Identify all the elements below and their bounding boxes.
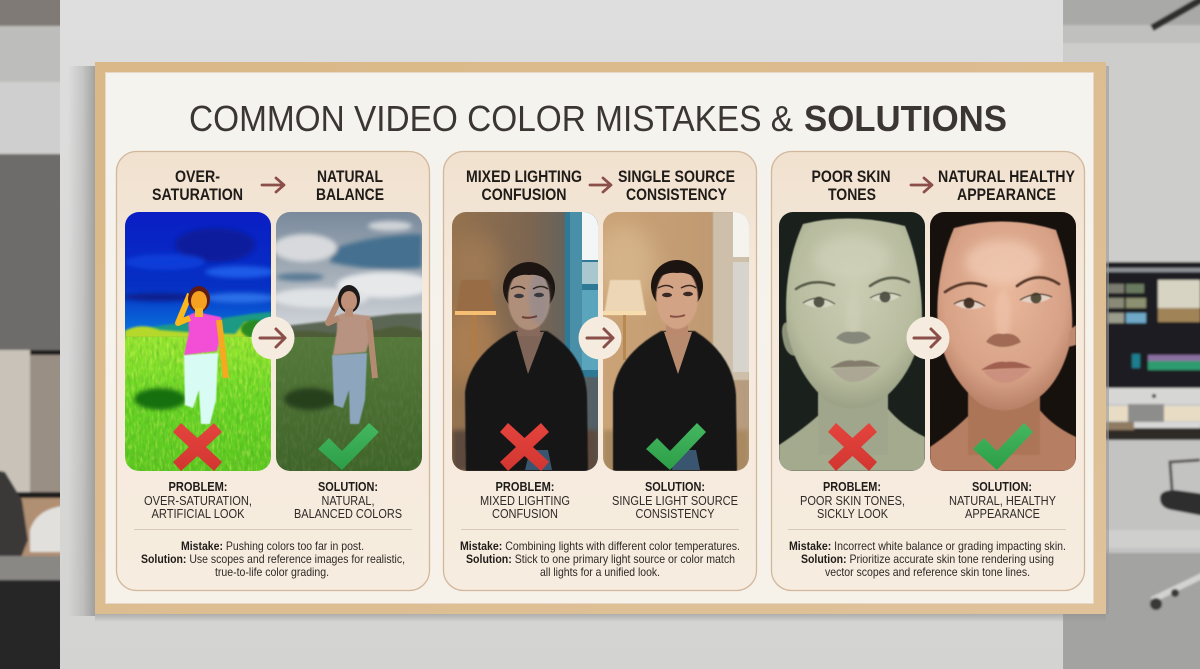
photo: over-saturated woman in field — [122, 212, 275, 471]
photo: mixed lighting portrait — [442, 212, 598, 471]
description text: Mistake: Incorrect white balance or grading impacting skin. — [789, 539, 1066, 553]
icon: red cross — [173, 423, 222, 471]
arrow: heading — [262, 178, 284, 192]
solution label — [612, 479, 738, 521]
problem label: ARTIFICIAL LOOK — [152, 506, 245, 521]
heading: over-saturation — [152, 167, 243, 204]
description text — [460, 539, 740, 579]
wooden frame — [95, 62, 1106, 614]
arrow: heading — [590, 178, 611, 192]
description text: vector scopes and reference skin tone lines. — [825, 565, 1030, 579]
icon: green check — [973, 423, 1033, 470]
solution label: NATURAL, HEALTHY — [949, 493, 1056, 508]
photo: sickly skin portrait — [779, 212, 925, 471]
problem label: MIXED LIGHTING — [480, 493, 570, 508]
solution label: BALANCED COLORS — [294, 506, 402, 521]
heading: natural balance — [316, 167, 384, 204]
heading: single source consistency: CONSISTENCY — [626, 185, 728, 204]
solution label: SOLUTION: — [645, 479, 705, 494]
photo: healthy skin portrait — [930, 212, 1076, 471]
background: blurred office right — [1062, 0, 1200, 669]
title: SOLUTIONS — [804, 98, 1007, 139]
photo: natural woman in field — [272, 212, 433, 471]
problem label: POOR SKIN TONES, — [800, 493, 905, 508]
heading: poor skin tones: TONES — [828, 185, 876, 204]
solution label — [949, 479, 1056, 521]
heading: mixed lighting confusion: MIXED LIGHTING — [466, 167, 582, 186]
problem label — [480, 479, 570, 521]
solution label: CONSISTENCY — [636, 506, 715, 521]
description text — [141, 539, 405, 579]
panel: mixed lighting to single source — [442, 152, 756, 590]
description text: true-to-life color grading. — [215, 565, 329, 579]
solution label: SOLUTION: — [318, 479, 378, 494]
icon: green check — [318, 423, 379, 470]
heading: mixed lighting confusion — [466, 167, 582, 204]
icon: arrow in circle — [906, 316, 950, 360]
heading: poor skin tones — [812, 167, 890, 204]
heading: natural healthy appearance: APPEARANCE — [957, 185, 1056, 204]
description text — [789, 539, 1066, 579]
description text: Mistake: Pushing colors too far in post. — [181, 539, 364, 553]
background: blurred office left — [0, 0, 65, 669]
heading: poor skin tones: POOR SKIN — [812, 167, 890, 186]
icon: red cross — [828, 423, 877, 471]
problem label: PROBLEM: — [496, 479, 554, 494]
solution label: APPEARANCE — [965, 506, 1040, 521]
solution label: SOLUTION: — [972, 479, 1032, 494]
heading: mixed lighting confusion: CONFUSION — [482, 185, 566, 204]
heading: single source consistency: SINGLE SOURCE — [618, 167, 735, 186]
description text: Solution: Use scopes and reference images for realistic, — [141, 552, 405, 566]
heading: natural balance: BALANCE — [316, 185, 384, 204]
problem label — [800, 479, 905, 521]
problem label: CONFUSION — [492, 506, 558, 521]
heading: over-saturation: SATURATION — [152, 185, 243, 204]
arrow: heading — [911, 178, 932, 192]
heading: natural healthy appearance — [938, 167, 1076, 204]
heading: single source consistency — [618, 167, 735, 204]
description text: Mistake: Combining lights with different color temperatures. — [460, 539, 740, 553]
problem label — [144, 479, 252, 521]
photo: single light source portrait — [595, 212, 749, 471]
icon: arrow in circle — [252, 316, 294, 360]
description text: all lights for a unified look. — [540, 565, 660, 579]
problem label: PROBLEM: — [168, 479, 228, 494]
icon: red cross — [500, 423, 549, 471]
solution label: NATURAL, — [322, 493, 374, 508]
description text: Solution: Stick to one primary light source or color match — [466, 552, 735, 566]
heading: over-saturation: OVER- — [175, 167, 220, 186]
description text: Solution: Prioritize accurate skin tone rendering using — [801, 552, 1054, 566]
problem label: SICKLY LOOK — [817, 506, 888, 521]
heading: natural healthy appearance: NATURAL HEALTHY — [938, 167, 1076, 186]
icon: arrow in circle — [578, 316, 622, 360]
title: COMMON VIDEO COLOR MISTAKES & — [189, 98, 793, 139]
solution label — [294, 479, 402, 521]
heading: natural balance: NATURAL — [317, 167, 383, 186]
panel: over-saturation to natural balance — [116, 152, 433, 590]
problem label: OVER-SATURATION, — [144, 493, 252, 508]
icon: green check — [646, 423, 706, 470]
problem label: PROBLEM: — [823, 479, 881, 494]
solution label: SINGLE LIGHT SOURCE — [612, 493, 738, 508]
panel: poor skin tones to natural healthy appearance — [772, 152, 1084, 590]
